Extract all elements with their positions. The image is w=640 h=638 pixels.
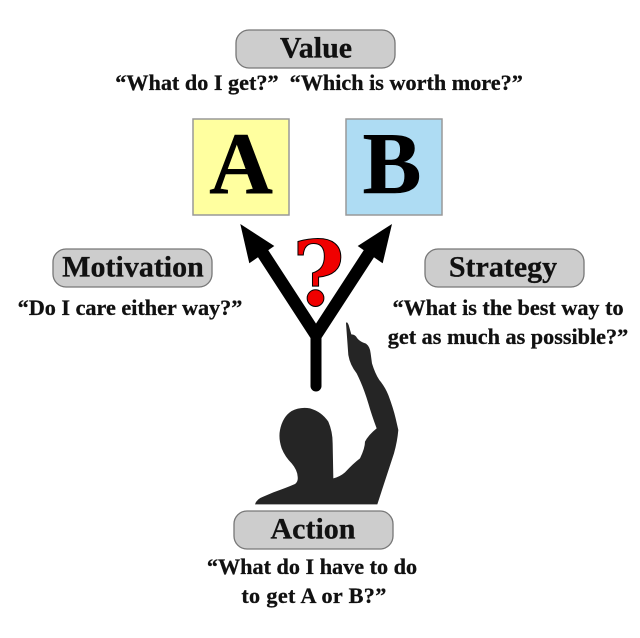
box B: B bbox=[363, 116, 421, 213]
Value questions: “What do I get?” “Which is worth more?” bbox=[115, 70, 523, 95]
icon: red question mark: ? bbox=[292, 221, 345, 327]
Strategy question: get as much as possible?” bbox=[388, 324, 628, 349]
Motivation label: Motivation bbox=[62, 251, 204, 284]
Action label bbox=[234, 511, 393, 549]
Action label: Action bbox=[270, 513, 356, 546]
box A: A bbox=[209, 116, 273, 213]
Strategy label: Strategy bbox=[449, 251, 557, 284]
Strategy question: “What is the best way to bbox=[392, 295, 624, 320]
Value label bbox=[236, 30, 395, 68]
icon: silhouette pointing up bbox=[255, 322, 398, 504]
Action question: “What do I have to do bbox=[207, 554, 417, 579]
Action question: to get A or B?” bbox=[241, 583, 387, 608]
box B bbox=[346, 116, 442, 215]
box A bbox=[193, 116, 289, 215]
Strategy label bbox=[425, 249, 584, 287]
Motivation question: “Do I care either way?” bbox=[18, 295, 242, 320]
forked arrow bbox=[240, 224, 392, 386]
Value label: Value bbox=[280, 32, 352, 65]
